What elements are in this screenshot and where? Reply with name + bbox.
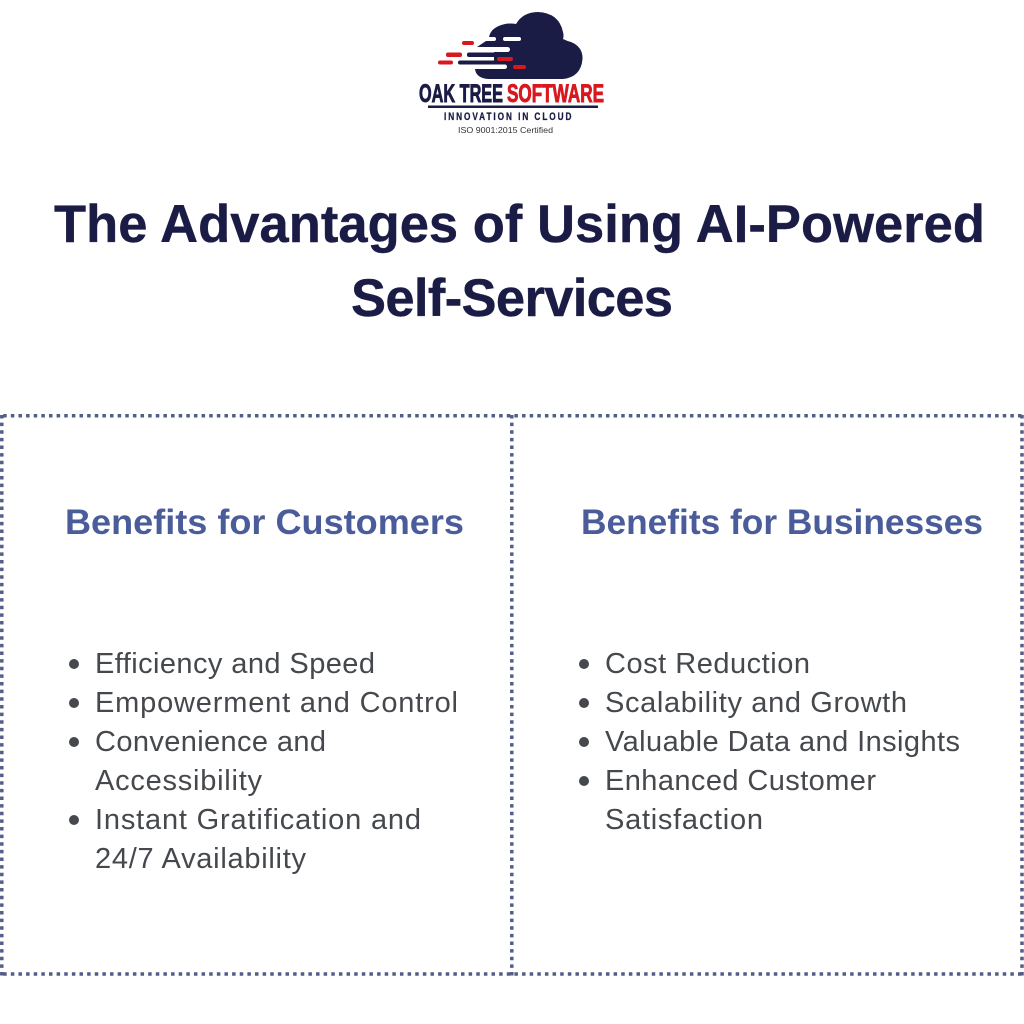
heading: businesses: Benefits for Businesses bbox=[581, 503, 983, 542]
list: business benefits: Enhanced Customer bbox=[605, 765, 876, 797]
panel: benefits for businesses bbox=[579, 503, 983, 836]
list: customer benefits: Empowerment and Control bbox=[95, 687, 458, 719]
list: business benefits: Cost Reduction bbox=[605, 648, 810, 680]
list: business benefits: Satisfaction bbox=[605, 804, 763, 836]
heading: customers: Benefits for Customers bbox=[65, 503, 464, 542]
logo wordmark: SOFTWARE bbox=[507, 80, 604, 108]
logo wordmark bbox=[419, 80, 604, 108]
logo: Oak Tree Software bbox=[419, 12, 604, 135]
logo wordmark: OAK TREE bbox=[419, 80, 503, 108]
list: customer benefits: 24/7 Availability bbox=[95, 843, 306, 875]
panel: benefits for customers bbox=[65, 503, 464, 875]
logo certification: ISO 9001:2015 Certified bbox=[458, 126, 553, 135]
title bbox=[54, 195, 985, 328]
title: The Advantages of Using AI-Powered bbox=[54, 195, 985, 254]
logo tagline: INNOVATION IN CLOUD bbox=[444, 111, 572, 123]
list: business benefits: Valuable Data and Insights bbox=[605, 726, 960, 758]
list: business benefits bbox=[579, 648, 960, 836]
list: customer benefits: Convenience and bbox=[95, 726, 326, 758]
icon: cloud with speed lines bbox=[438, 12, 583, 79]
panel borders: dotted frame bbox=[2, 415, 1024, 976]
list: business benefits: Scalability and Growth bbox=[605, 687, 907, 719]
list: customer benefits: Efficiency and Speed bbox=[95, 648, 375, 680]
list: customer benefits: Accessibility bbox=[95, 765, 262, 797]
list: customer benefits bbox=[69, 648, 458, 875]
title: Self-Services bbox=[351, 269, 673, 328]
list: customer benefits: Instant Gratification and bbox=[95, 804, 421, 836]
